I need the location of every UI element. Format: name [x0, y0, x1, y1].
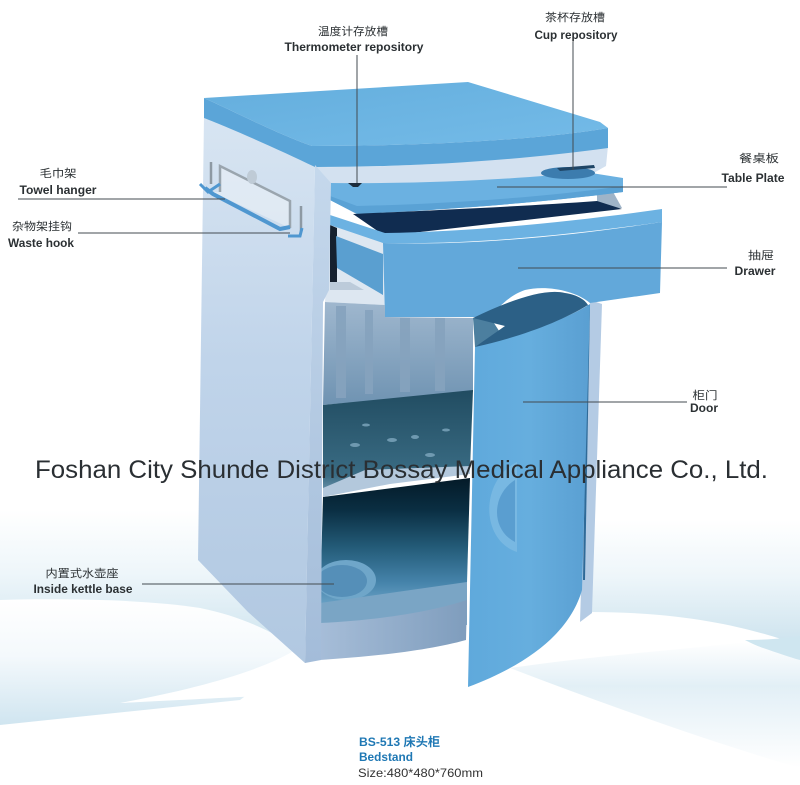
shelf front lip	[323, 466, 470, 497]
label: inside kettle base: 内置式水壶座	[46, 566, 118, 580]
product model and size: BS-513 床头柜	[359, 734, 440, 749]
table plate	[330, 172, 623, 214]
bottom plinth	[320, 600, 467, 660]
space behind drawer	[325, 215, 385, 305]
drawer front	[383, 222, 662, 317]
leader lines	[18, 42, 727, 584]
label: table plate: 餐桌板	[739, 151, 779, 165]
drawer rim	[330, 209, 662, 243]
label: door	[690, 388, 718, 415]
watermark company name: Foshan City Shunde District Bossay Medical Appliance Co., Ltd.	[35, 456, 768, 484]
kettle base	[316, 560, 376, 600]
front band under top	[315, 146, 608, 184]
perforated shelf	[323, 390, 473, 497]
product model and size: Bedstand	[359, 750, 413, 764]
label: thermometer repository: 温度计存放槽	[318, 24, 388, 38]
towel hanger and waste hook	[200, 162, 302, 236]
strip behind drawer	[597, 190, 622, 208]
label: waste hook: Waste hook	[8, 236, 74, 250]
cabinet top	[204, 82, 608, 146]
cabinet right side strip	[580, 300, 602, 622]
label: towel hanger: Towel hanger	[20, 183, 97, 197]
product model and size	[358, 734, 483, 780]
label: drawer: Drawer	[734, 264, 776, 278]
label: table plate: Table Plate	[722, 171, 785, 185]
label: inside kettle base: Inside kettle base	[34, 582, 133, 596]
product model and size: Size:480*480*760mm	[358, 766, 483, 780]
door handle recess	[489, 462, 517, 552]
label: cup repository	[534, 10, 618, 42]
cabinet front left post	[305, 165, 331, 663]
cabinet door	[468, 292, 590, 687]
label: door: Door	[690, 401, 718, 415]
floor edge	[320, 582, 467, 640]
label: waste hook: 杂物架挂钩	[12, 219, 72, 233]
label: table plate	[722, 151, 785, 185]
cavity back wall	[323, 302, 473, 405]
label: cup repository: Cup repository	[534, 28, 618, 42]
label: towel hanger: 毛巾架	[40, 166, 76, 180]
label: inside kettle base	[34, 566, 133, 596]
cup recess	[541, 167, 595, 179]
lower compartment	[320, 478, 470, 605]
label: waste hook	[8, 219, 74, 250]
label: drawer: 抽屉	[748, 248, 774, 262]
label: door: 柜门	[692, 388, 718, 402]
label: towel hanger	[20, 166, 97, 197]
label: cup repository: 茶杯存放槽	[545, 10, 605, 24]
open drawer interior	[353, 201, 622, 236]
bedside cabinet	[198, 82, 662, 687]
cabinet left side panel	[198, 116, 315, 663]
label: thermometer repository	[284, 24, 424, 54]
label: thermometer repository: Thermometer repository	[284, 40, 424, 54]
drawer side	[336, 236, 383, 295]
label: drawer	[734, 248, 776, 278]
